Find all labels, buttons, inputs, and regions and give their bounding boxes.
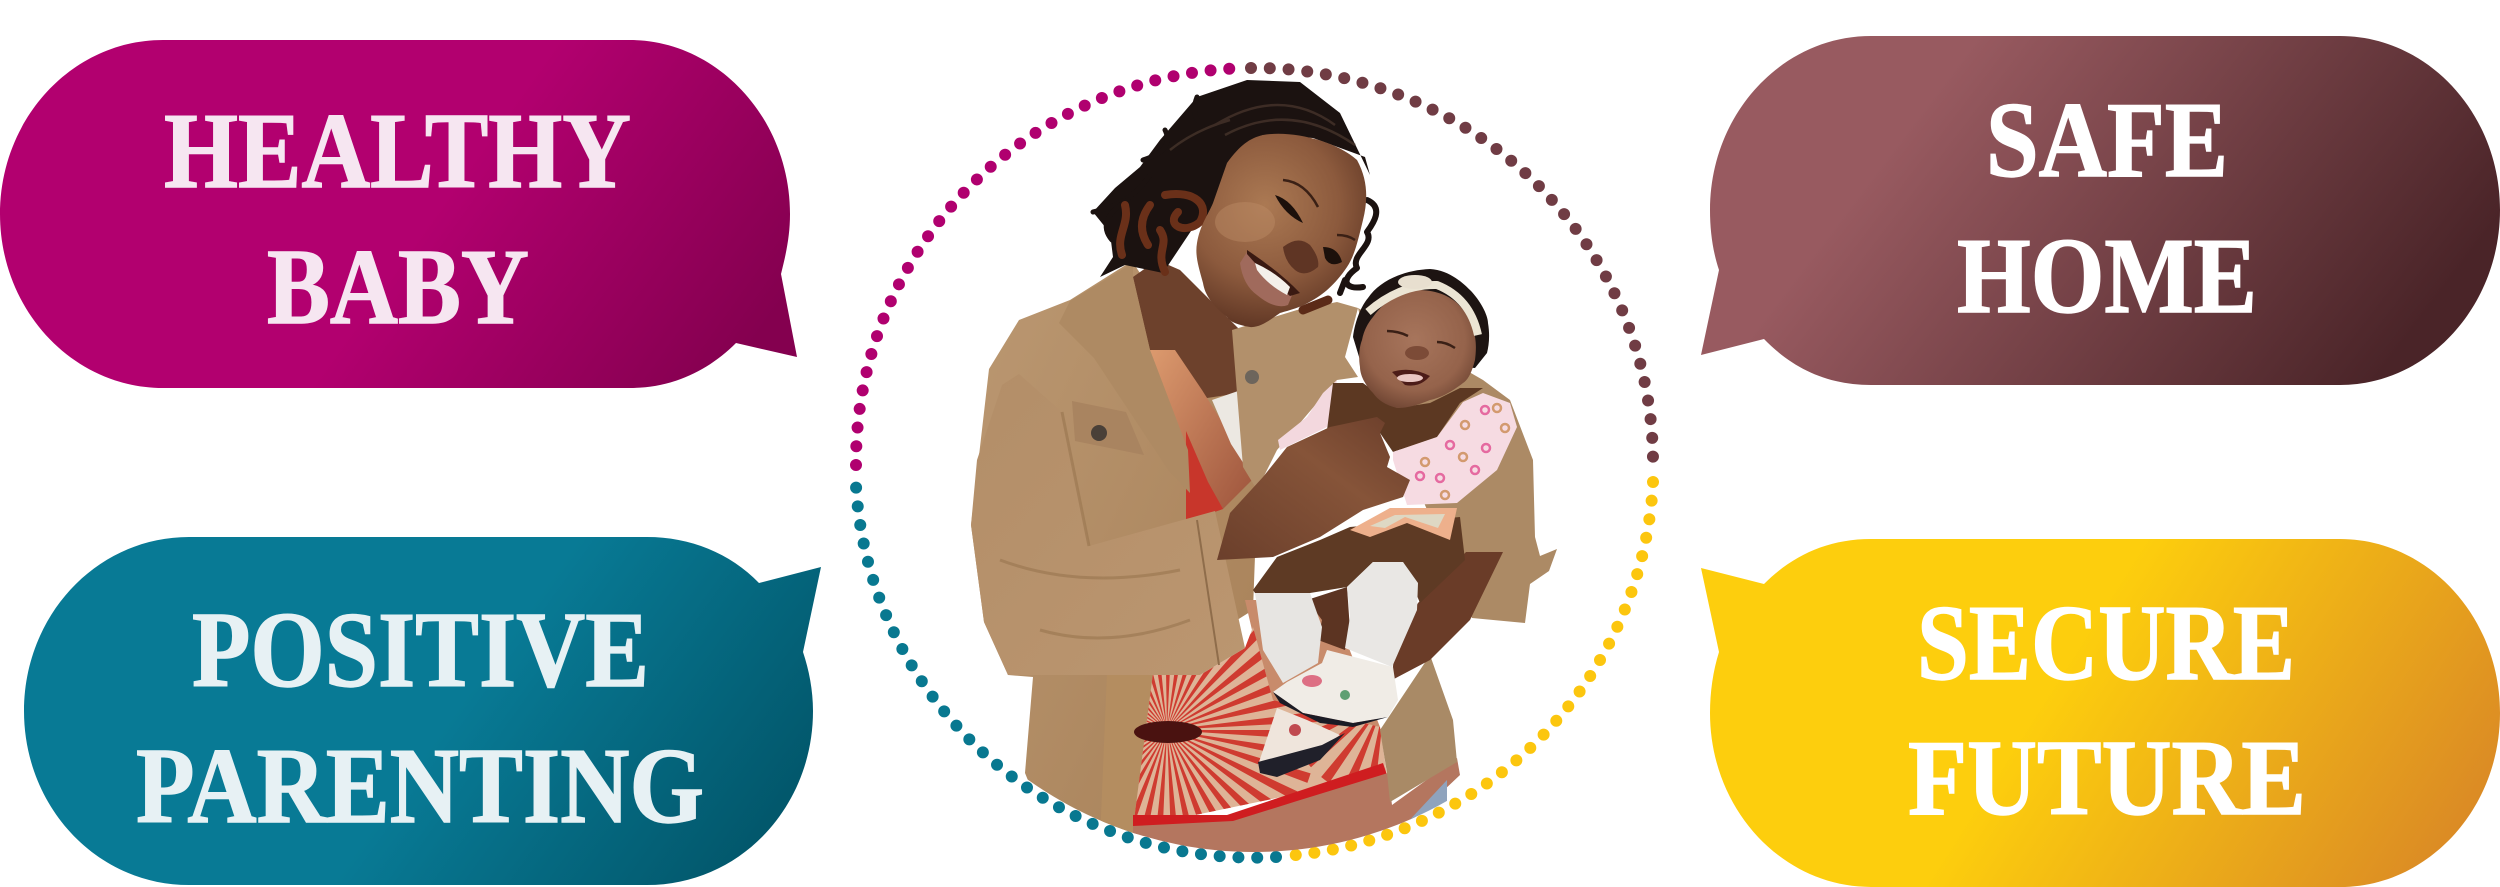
bubble shape: secure future [1701,539,2500,887]
jacket: far sleeve [1358,308,1557,623]
baby: tongue [1397,374,1423,382]
sleeve cuff seam [1197,520,1219,665]
brooch left [1091,425,1107,441]
dotted circle ring [856,68,1653,858]
jacket: lower right panel [1380,655,1457,802]
ring arc: yellow [1291,482,1653,856]
baby: near leg [1345,562,1418,667]
lower shoe upper [1258,708,1340,765]
headband strip [1368,285,1478,335]
mother's far arm [1392,552,1503,680]
mother's front hand and forearm [1217,417,1410,560]
teeth [1255,263,1290,295]
butterfly wings [1350,508,1457,540]
heading: healthy baby [164,92,631,347]
heading: healthy baby: HEALTHY [164,92,631,211]
baby: face [1359,290,1476,408]
bubble shape: safe home [1701,36,2500,385]
mother's supporting hand [1307,587,1350,650]
baby: sleeve flower pattern [1416,404,1509,499]
bubble shape: healthy baby [0,40,797,388]
dress: satin bodice [1150,350,1252,512]
skirt base [1133,627,1387,828]
baby: left arm sleeve [1278,380,1337,450]
baby: hair [1353,269,1489,368]
panel: healthy baby speech bubble [0,40,797,388]
baby: upper shoe [1273,650,1398,727]
baby: headband [1368,275,1478,335]
lower shoe flowers [1289,724,1301,736]
ring arc: magenta [856,68,1234,465]
heading: safe home [1957,81,2257,336]
baby: pink patterned sleeve [1393,393,1517,505]
brooch right [1245,370,1259,384]
jacket: right lapel and collar [1232,302,1358,490]
upper shoe flowers [1302,675,1350,700]
heading: safe home: HOME [1957,217,2257,336]
bubble shape: positive parenting [24,537,821,885]
panel: safe home speech bubble [1701,36,2500,385]
heading: secure future: SECURE [1917,584,2295,703]
nose [1283,240,1318,273]
hair: dreadlock texture [1093,97,1202,240]
hair: back and crown [1093,80,1370,277]
neck and chest [1133,260,1240,398]
skirt: printed dress [1133,628,1460,852]
jacket: lower placket shading [1100,794,1136,834]
dress: red strip [1186,431,1223,522]
baby: nose [1405,346,1429,360]
hair: right locks [1340,200,1376,293]
baby: open mouth [1392,370,1430,386]
hair: auburn lock under chin [1303,300,1328,310]
headband flower [1398,275,1432,289]
jeans [1410,780,1447,820]
baby: butterfly appliqué [1350,508,1457,540]
eyebrows [1283,180,1355,240]
heading: safe home: SAFE [1986,81,2228,200]
illustration: mother holding smiling baby [971,80,1557,880]
jacket: front sleeve [971,452,1245,675]
skirt red band [1133,763,1387,828]
skirt satin hem [1133,758,1460,852]
panel: secure future speech bubble [1701,539,2500,887]
white lace [1212,391,1243,462]
heading: secure future: FUTURE [1908,719,2306,838]
ring arc: brown [1251,68,1653,463]
baby: far leg [1255,593,1322,683]
lower shoe sole [1258,733,1345,777]
heading: positive parenting: PARENTING [136,727,704,846]
eyes [1275,195,1342,264]
upper shoe upper [1273,650,1398,723]
jacket: torso [971,261,1260,880]
butterfly inner [1370,514,1445,528]
sleeve folds [1000,412,1190,638]
heading: secure future [1908,584,2306,838]
skirt dark centre [1134,721,1202,743]
hair: auburn curls [1120,194,1203,272]
upper shoe sole [1273,692,1388,727]
heading: positive parenting [136,591,704,846]
cheek shine [1215,202,1275,242]
baby: outfit bodice [1327,383,1483,452]
baby: lower shoe [1258,708,1345,777]
baby: closed eyes [1387,331,1455,348]
hair: texture highlights [1170,105,1355,150]
mouth line [1247,250,1300,296]
jacket: left lapel [1059,263,1190,493]
skirt radial rays [1134,630,1381,815]
lower lip [1240,252,1293,306]
heading: positive parenting: POSITIVE [192,591,649,710]
baby: outfit lower [1253,517,1465,603]
jacket: chest pocket [1072,401,1144,455]
panel: positive parenting speech bubble [24,537,821,885]
face [1196,134,1366,327]
skirt: belly base [1245,600,1380,727]
heading: healthy baby: BABY [267,228,529,347]
ring arc: teal [856,486,1276,858]
